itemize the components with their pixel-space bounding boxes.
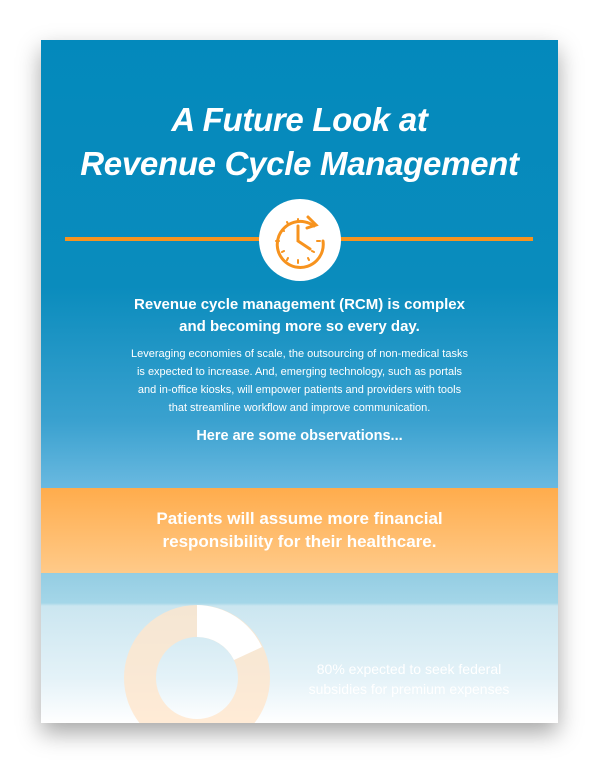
stat text: subsidies for premium expenses (309, 681, 509, 697)
title (80, 101, 520, 182)
text block: is expected to increase. And, emerging technology, such as portals (137, 366, 462, 378)
title: A Future Look at (171, 101, 428, 138)
panel: orange banner: responsibility for their healthcare. (163, 532, 436, 551)
heading: Revenue cycle management (RCM) is complex (134, 296, 465, 313)
panel: orange banner: Patients will assume more financial (156, 509, 443, 528)
text block: that streamline workflow and improve communication. (169, 402, 430, 414)
text block: and in-office kiosks, will empower patients and providers with tools (138, 384, 461, 396)
subheading: Here are some observations... (196, 428, 403, 444)
text block: Leveraging economies of scale, the outsourcing of non-medical tasks (131, 348, 468, 360)
text block (131, 348, 468, 414)
heading (134, 296, 465, 335)
panel: orange banner (41, 488, 558, 573)
card (41, 40, 558, 723)
panel: stats (41, 573, 558, 723)
stat text: 80% expected to seek federal (317, 661, 501, 677)
divider line with clock icon (65, 199, 533, 281)
heading: and becoming more so every day. (179, 318, 420, 335)
icon: clock (259, 199, 341, 281)
stat text (309, 661, 509, 697)
panel: header (41, 40, 558, 488)
title: Revenue Cycle Management (80, 145, 519, 182)
donut chart (124, 605, 270, 723)
